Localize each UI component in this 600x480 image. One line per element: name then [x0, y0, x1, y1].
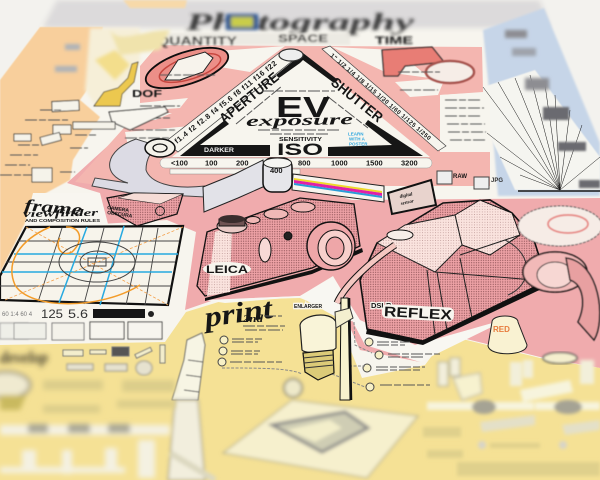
pink upper white stripes [125, 46, 490, 152]
knob and strap lug [259, 232, 292, 262]
shadow [205, 248, 363, 301]
heading: quantity space time: TIME [375, 35, 413, 47]
aperture scale band [165, 50, 296, 152]
chart: fan diagram [483, 75, 600, 191]
chart: exposure triangle [165, 46, 446, 159]
icon: red shutter block [382, 47, 474, 83]
print steps list [218, 322, 440, 391]
icon: tall strip tool [172, 333, 205, 400]
RAW and JPG icons: JPG [491, 178, 503, 184]
viewfinder word: viewfinder [23, 208, 98, 220]
blurred technical frames [505, 30, 549, 90]
orange golden spiral [12, 227, 140, 304]
sketch boxes [14, 100, 115, 182]
scale values: <100 [171, 158, 188, 168]
panel: frame viewfinder heading [23, 193, 108, 224]
icon: tall strip lower [168, 400, 215, 480]
Leica label [203, 262, 251, 276]
panel: orange top tab [123, 0, 187, 8]
icon: camera obscura box [107, 193, 183, 226]
front face lines [427, 235, 548, 335]
DSLR label: DSLR [371, 301, 392, 310]
icon: enlarger [294, 298, 353, 400]
bellows stack [303, 350, 334, 380]
tray [453, 373, 482, 400]
icon: Leica camera [197, 198, 363, 301]
panel: pink upper section [75, 45, 490, 188]
icon: digital sensor card [388, 180, 436, 214]
scale values: 200 [236, 158, 249, 168]
learn with a poster [348, 132, 368, 146]
heading: print [199, 293, 285, 334]
icon: camera obscura box: OBSCURA [107, 210, 133, 220]
scale bar [160, 158, 432, 168]
tools top [510, 360, 594, 386]
panel: yellow sketches corner [85, 28, 140, 105]
icon: digital sensor card: sensor [399, 199, 415, 207]
panel: exposure readout row: 60 1:4 60 4 [2, 312, 33, 318]
icon: film roll 400 [203, 158, 292, 212]
top dial [217, 215, 247, 233]
RAW and JPG icons: RAW [453, 174, 467, 180]
prism hump [455, 200, 520, 255]
panel: orange left margin [0, 27, 103, 273]
trays [480, 415, 600, 435]
white heading panel [25, 193, 108, 224]
white strip under leica [205, 277, 360, 322]
learn with a poster: POSTER [349, 142, 368, 146]
shutter label: SHUTTER [328, 74, 386, 125]
panel: exposure readout row: 5.6 [68, 307, 88, 321]
gray circles [472, 400, 582, 414]
heading: develop: develop [0, 348, 48, 367]
heading: quantity space time [150, 33, 413, 48]
scale values: 3200 [401, 158, 418, 168]
panel: blurred right tools [423, 358, 600, 476]
ISO label: ISO [277, 140, 323, 159]
black frame segments [180, 53, 423, 156]
title [184, 10, 415, 36]
white bench band [0, 425, 170, 435]
panel: thumbnail frames [0, 322, 162, 340]
central camera outline [59, 242, 135, 282]
panel: second props row [67, 361, 152, 375]
heading: print: print [199, 293, 275, 334]
body light panel [207, 226, 232, 296]
text blocks [423, 427, 600, 476]
composition rules: AND COMPOSITION RULES [25, 218, 100, 223]
icon: lens ring [141, 39, 233, 97]
icon: developing tank [0, 372, 30, 398]
second and third dials [246, 202, 315, 224]
white tool bars [427, 380, 600, 410]
aperture label: APERTURE [216, 69, 282, 126]
panel: yellow print section [0, 298, 600, 480]
icon: apex dial [279, 49, 303, 61]
white triangle backing [172, 52, 430, 157]
chart: composition grid [0, 226, 183, 305]
strap [337, 245, 395, 303]
text blocks [43, 380, 175, 413]
scale values [171, 158, 418, 168]
panel: pink middle section [67, 142, 600, 368]
quantity of light note [236, 86, 368, 134]
heading: quantity space time: SPACE [278, 33, 328, 45]
enlarger head [300, 315, 336, 353]
shutter scale band: 1" 1/2 1/4 1/8 1/15 1/30 1/60 1/125 1/250 [329, 53, 432, 142]
scale values: 1500 [366, 158, 383, 168]
note panel [109, 107, 168, 130]
sensitivity label: SENSITIVITY [279, 137, 322, 143]
top-left blurred sketches [55, 30, 170, 80]
darker label: DARKER [204, 148, 235, 154]
Reflex label: REFLEX [384, 303, 453, 323]
shadow [366, 281, 550, 345]
scale values: 1000 [331, 158, 348, 168]
blue thirds lines [2, 226, 178, 305]
icon: camera obscura box: CAMERA [107, 205, 130, 214]
EV label: EV [276, 92, 331, 124]
bottles [438, 358, 460, 386]
technical frames near fan [543, 107, 600, 188]
bottom left circles [478, 441, 567, 449]
icon: dish ring [543, 352, 577, 364]
icon: yellow frame [226, 14, 258, 30]
small explanatory notes around the triangle [109, 72, 486, 140]
enlarger label: ENLARGER [294, 304, 322, 310]
white strip near dslr [344, 305, 510, 362]
orange diagonals [5, 227, 183, 305]
camera body [197, 198, 360, 296]
aperture scale band: f1.4 f2 f2.8 f4 f5.6 f8 f11 f16 f22 [173, 59, 278, 146]
panel: exposure readout row [2, 307, 154, 321]
exposure script: exposure [246, 112, 354, 130]
icon: side lens [523, 252, 600, 340]
rainbow film strip [292, 174, 384, 202]
icon: red film canister [488, 316, 527, 354]
panel: white fan section [483, 70, 600, 190]
scale values: 800 [298, 158, 311, 168]
icon: yellow sketch [94, 62, 138, 106]
panel: props row [63, 345, 165, 363]
lens [307, 222, 355, 270]
2nd label: 2nd [242, 313, 264, 325]
camera body [360, 200, 547, 341]
panel: blurred left tools [0, 348, 175, 478]
Leica label: LEICA [206, 264, 248, 276]
scale values: 100 [205, 158, 218, 168]
title word: Photography [184, 10, 415, 36]
heading: quantity space time: QUANTITY [157, 34, 237, 48]
arm [335, 308, 353, 328]
icon: pink dial [518, 206, 600, 246]
white verticals [0, 440, 155, 478]
frame word: frame [24, 197, 83, 219]
top dial [387, 230, 413, 240]
column [340, 298, 350, 400]
light top plate [377, 215, 462, 272]
RAW and JPG icons [437, 171, 503, 189]
icon: lavender dial arc [92, 139, 205, 197]
icon: digital sensor card: digital [399, 192, 414, 200]
learn with a poster: WITH A [349, 136, 366, 142]
panel: blue right margin [483, 8, 600, 196]
panel: exposure readout row: 125 [41, 307, 63, 321]
gray grid [0, 227, 179, 305]
rear strap [505, 240, 527, 295]
DOF label: DOF [132, 89, 162, 100]
panel: left column sketches [0, 62, 138, 182]
learn with a poster: LEARN [348, 132, 364, 136]
icon: red film canister: RED [493, 325, 510, 334]
icon: film roll 400: 400 [270, 166, 283, 175]
icon: baseboard [223, 379, 418, 478]
top gray strip [42, 0, 550, 28]
ISO scale row [160, 158, 432, 174]
icon: DSLR reflex camera [337, 200, 550, 345]
